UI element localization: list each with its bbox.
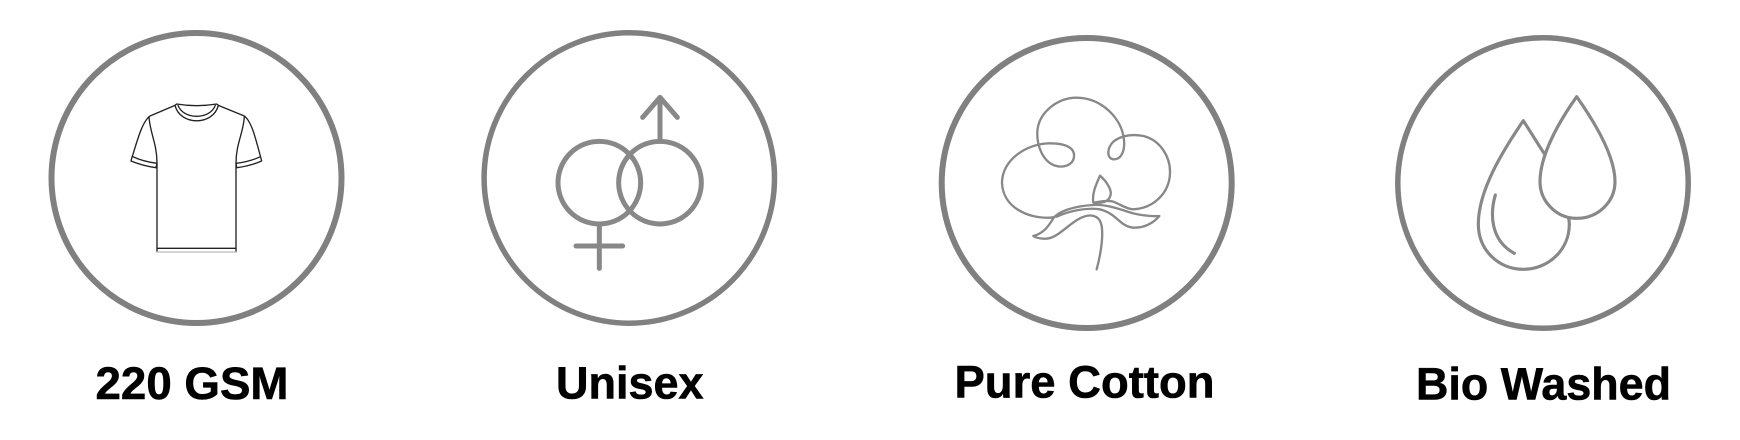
icon: water drops [1478,97,1615,269]
icon: cotton boll [1002,98,1170,269]
panel: Bio Washed [1398,38,1688,409]
ring: Pure Cotton [942,38,1232,328]
icon: male and female symbols [558,97,701,268]
ring: Bio Washed [1398,38,1688,328]
panel: Pure Cotton [942,38,1232,407]
panel: Unisex [484,33,774,409]
label: Unisex: Unisex [556,358,704,409]
panel: 220 GSM [52,33,342,409]
ring: 220 GSM [52,33,342,323]
ring: Unisex [484,33,774,323]
label: Bio Washed: Bio Washed [1416,358,1671,409]
label: Pure Cotton: Pure Cotton [954,356,1214,407]
label: 220 GSM: 220 GSM [96,358,288,409]
icon: t-shirt [131,104,262,252]
